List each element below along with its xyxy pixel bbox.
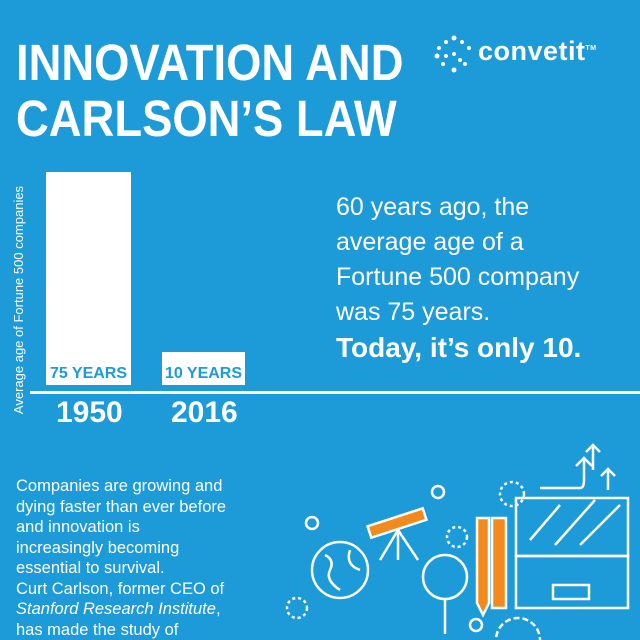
body text: dying faster than ever before — [16, 498, 226, 516]
callout text: Today, it’s only 10. — [336, 332, 581, 363]
callout text — [336, 193, 581, 363]
bar: 2016 — [162, 352, 245, 385]
dots/circles decor — [287, 482, 524, 631]
callout text: Fortune 500 company — [336, 263, 579, 291]
callout text: 60 years ago, the — [336, 193, 529, 221]
callout text: was 75 years. — [336, 298, 490, 326]
body text: essential to survival. — [16, 559, 165, 577]
callout text: average age of a — [336, 228, 524, 256]
bar chart: 2016 — [171, 396, 238, 429]
body text: Stanford Research Institute, — [16, 600, 221, 618]
title — [16, 34, 403, 147]
arrows — [540, 445, 615, 490]
bar: 1950 — [46, 172, 131, 385]
body text: Curt Carlson, former CEO of — [16, 580, 224, 598]
bar chart — [46, 172, 245, 429]
bar: 1950: 75 YEARS — [50, 365, 127, 382]
body text: increasingly becoming — [16, 538, 179, 556]
bar chart: 1950 — [56, 396, 123, 429]
logo: convetit — [434, 36, 597, 72]
pencil and ruler — [477, 518, 506, 615]
body text — [16, 477, 226, 638]
body text: and innovation is — [16, 518, 140, 536]
title: CARLSON’S LAW — [16, 90, 397, 147]
title: INNOVATION AND — [16, 34, 403, 91]
year labels — [56, 396, 238, 429]
logo: convetit: convetitTM — [478, 36, 597, 66]
gear — [496, 618, 540, 640]
body text: has made the study of — [16, 620, 178, 638]
bar: 2016: 10 YEARS — [165, 365, 242, 382]
telescope — [368, 508, 426, 560]
body text: Companies are growing and — [16, 477, 222, 495]
laptop — [516, 498, 628, 608]
magnifier — [423, 555, 467, 634]
y-axis label: Average age of Fortune 500 companies — [11, 186, 26, 414]
illustration: innovation icons — [286, 443, 630, 640]
globe — [312, 542, 368, 598]
